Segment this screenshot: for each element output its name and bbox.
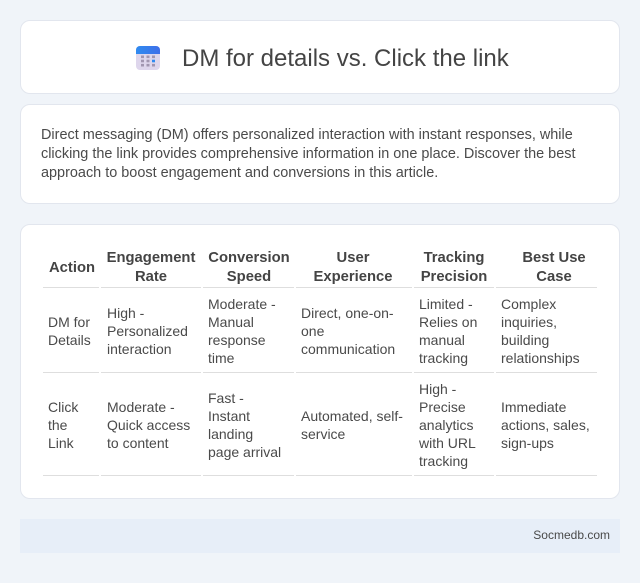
table row: DM for Details: relationships <box>501 350 580 366</box>
table row: Click the Link: High - <box>419 381 456 397</box>
table row: Click the Link <box>48 381 590 469</box>
table row: Click the Link: with URL <box>419 435 476 451</box>
panel: title card <box>20 20 620 94</box>
title: DM for details vs. Click the link <box>182 45 509 72</box>
icon: calendar <box>136 46 160 70</box>
table row: DM for Details: Moderate - <box>208 296 276 312</box>
table row: Click the Link: sign-ups <box>501 435 554 451</box>
table header: Conversion <box>208 250 290 266</box>
panel: introduction <box>20 104 620 204</box>
text block: introduction: clicking the link provides comprehensive information in one place. Discover the best <box>41 146 575 162</box>
table header: Speed <box>227 269 271 285</box>
table row: Click the Link: the <box>48 417 67 433</box>
table header: Best Use <box>522 250 586 266</box>
text block: introduction <box>41 127 576 181</box>
table row: DM for Details: Relies on <box>419 314 477 330</box>
table header: Experience <box>314 269 392 285</box>
table header: User <box>337 250 369 266</box>
table header: Rate <box>135 269 167 285</box>
table row: Click the Link: service <box>301 426 345 442</box>
table row: DM for Details: interaction <box>107 341 172 357</box>
table header: Tracking <box>424 250 484 266</box>
table row: Click the Link: page arrival <box>208 444 281 460</box>
table row: Click the Link: landing <box>208 426 253 442</box>
table row: Click the Link: Precise <box>419 399 466 415</box>
table row: DM for Details: building <box>501 332 549 348</box>
table row: DM for Details: inquiries, <box>501 314 557 330</box>
table row: Click the Link: Quick access <box>107 417 190 433</box>
table row: DM for Details: one <box>301 323 324 339</box>
text block: introduction: Direct messaging (DM) offers personalized interaction with instant responses, while <box>41 127 573 143</box>
table row: Click the Link: Immediate <box>501 399 566 415</box>
table row: Click the Link: actions, sales, <box>501 417 590 433</box>
table row: DM for Details: manual <box>419 332 465 348</box>
table row: DM for Details: response <box>208 332 266 348</box>
table row: DM for Details: time <box>208 350 234 366</box>
table row: DM for Details: Direct, one-on- <box>301 305 394 321</box>
table row: DM for Details: High - <box>107 305 144 321</box>
table header <box>49 250 586 285</box>
table row: Click the Link: tracking <box>419 453 468 469</box>
table row: DM for Details: DM for <box>48 314 90 330</box>
text block: introduction: approach to boost engagement and conversions in this article. <box>41 165 438 181</box>
table header: Action <box>49 260 95 276</box>
table row: DM for Details: Details <box>48 332 91 348</box>
table row: Click the Link: analytics <box>419 417 473 433</box>
table row: Click the Link: Instant <box>208 408 250 424</box>
table row: DM for Details: tracking <box>419 350 468 366</box>
panel: comparison table <box>20 224 620 499</box>
table row: Click the Link: Automated, self- <box>301 408 403 424</box>
table row: DM for Details: Manual <box>208 314 254 330</box>
table row: Click the Link: Click <box>48 399 78 415</box>
footer bar <box>20 519 620 553</box>
table row: DM for Details <box>48 296 580 366</box>
table row: Click the Link: Link <box>48 435 74 451</box>
table row: DM for Details: Limited - <box>419 296 473 312</box>
table row: Click the Link: Moderate - <box>107 399 175 415</box>
table header: Case <box>536 269 572 285</box>
table row: DM for Details: Complex <box>501 296 556 312</box>
table row: DM for Details: Personalized <box>107 323 188 339</box>
table row: Click the Link: Fast - <box>208 390 244 406</box>
table row: Click the Link: to content <box>107 435 168 451</box>
table header: Precision <box>421 269 487 285</box>
footer text: Socmedb.com <box>533 528 610 542</box>
table header: Engagement <box>107 250 195 266</box>
table row: DM for Details: communication <box>301 341 395 357</box>
